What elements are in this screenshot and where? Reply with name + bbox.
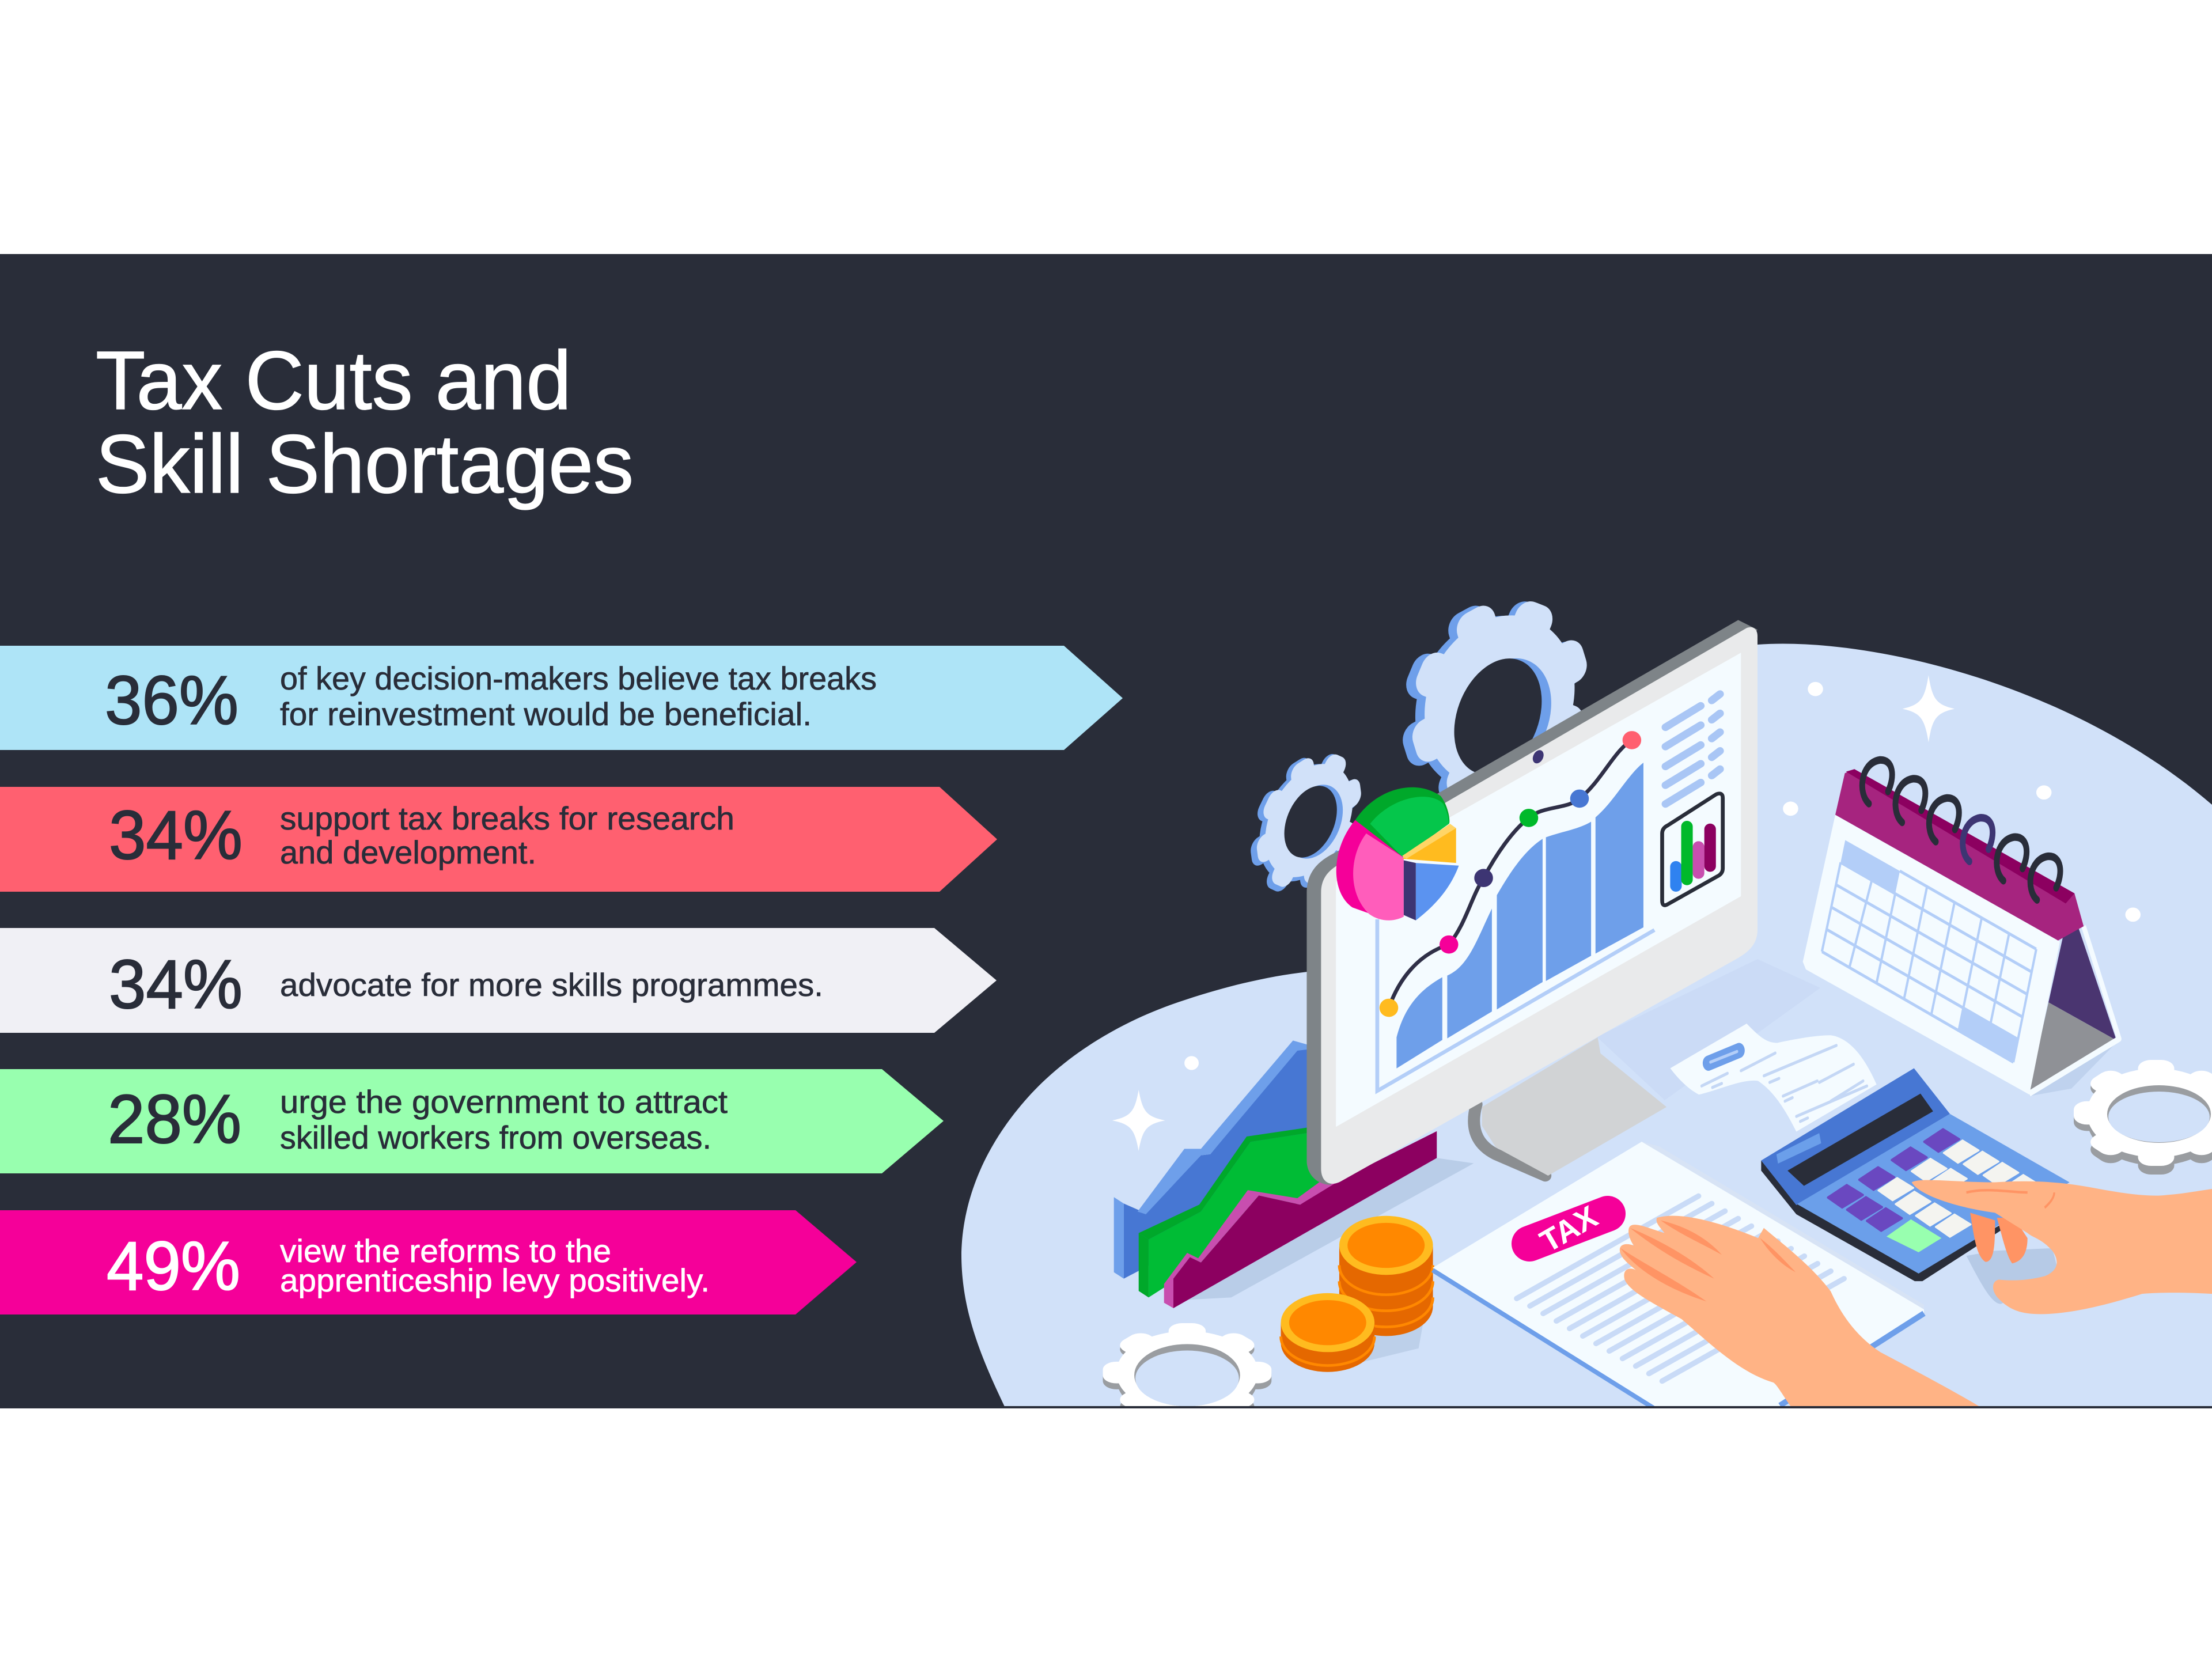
title [96,334,634,510]
tax sheet [1433,1142,1924,1408]
chart axis [1377,919,1654,1091]
green key [1887,1219,1941,1252]
arrow row: 36%: for reinvestment would be beneficial. [280,696,812,732]
gear: small behind monitor [1251,754,1361,892]
monitor [1306,620,1758,1185]
3D area charts [1114,1040,1474,1308]
calendar grid [1822,840,2036,1062]
arrow row: 36% [0,646,1123,750]
calendar [1803,760,2121,1096]
monitor stand [1474,1037,1666,1176]
arrow row: 34% research: 34% [109,797,243,874]
arrow row: 34% skills: advocate for more skills programmes. [280,967,823,1003]
arrow row: 34% skills [0,928,997,1033]
white keys [1878,1140,2040,1237]
camera dot [1532,750,1544,764]
arrow row: 34% research: and development. [280,834,536,870]
text list lines [1665,694,1720,804]
desk shadow of monitor [1597,959,1820,1100]
title: Tax Cuts and [96,334,571,427]
line chart [1389,740,1632,1008]
arrow row: 49%: 49% [107,1228,240,1305]
arrow row: 34% research: support tax breaks for research [280,800,734,836]
coins [1281,1216,1433,1372]
arrow row: 28%: urge the government to attract [280,1084,728,1120]
sheet lines [1517,1196,1844,1381]
pie chart [1336,787,1459,920]
sparkles and dots left [1112,802,1798,1151]
mini bar chart icon [1662,794,1723,906]
arrow row: 34% research [0,787,997,892]
arrow row: 28%: 28% [108,1081,241,1158]
calculator display [1787,1093,1933,1186]
gear: right [2074,1060,2212,1175]
arrow row: 36%: of key decision-makers believe tax breaks [280,660,877,696]
arrow row: 49%: apprenticeship levy positively. [280,1262,710,1298]
arrow row: 28% [0,1069,944,1173]
area chart columns [1396,763,1643,1069]
title: Skill Shortages [96,418,634,510]
binder rings [1862,760,2061,900]
desk blob [961,644,2212,1408]
arrow row: 36%: 36% [105,662,238,739]
gear: large behind monitor [1403,601,1587,793]
gear: bottom left [1103,1323,1272,1406]
calculator [1761,1068,2071,1281]
purple keys [1828,1129,1960,1231]
sparkles and dots right [1783,675,2141,922]
arrow row: 34% skills: 34% [109,946,243,1023]
illustration: tax desk scene [961,571,2212,1430]
arrow row: 49%: view the reforms to the [280,1233,611,1269]
TAX pill: TAX [1534,1199,1604,1259]
arrow row: 49% [0,1210,857,1315]
screen [1336,653,1741,1127]
hand: pointing right [1912,1180,2212,1314]
panel: dark background [0,254,2212,1408]
receipt [1670,1024,1877,1132]
arrow row: 28%: skilled workers from overseas. [280,1119,711,1156]
hand: left on sheet [1620,1216,1983,1409]
